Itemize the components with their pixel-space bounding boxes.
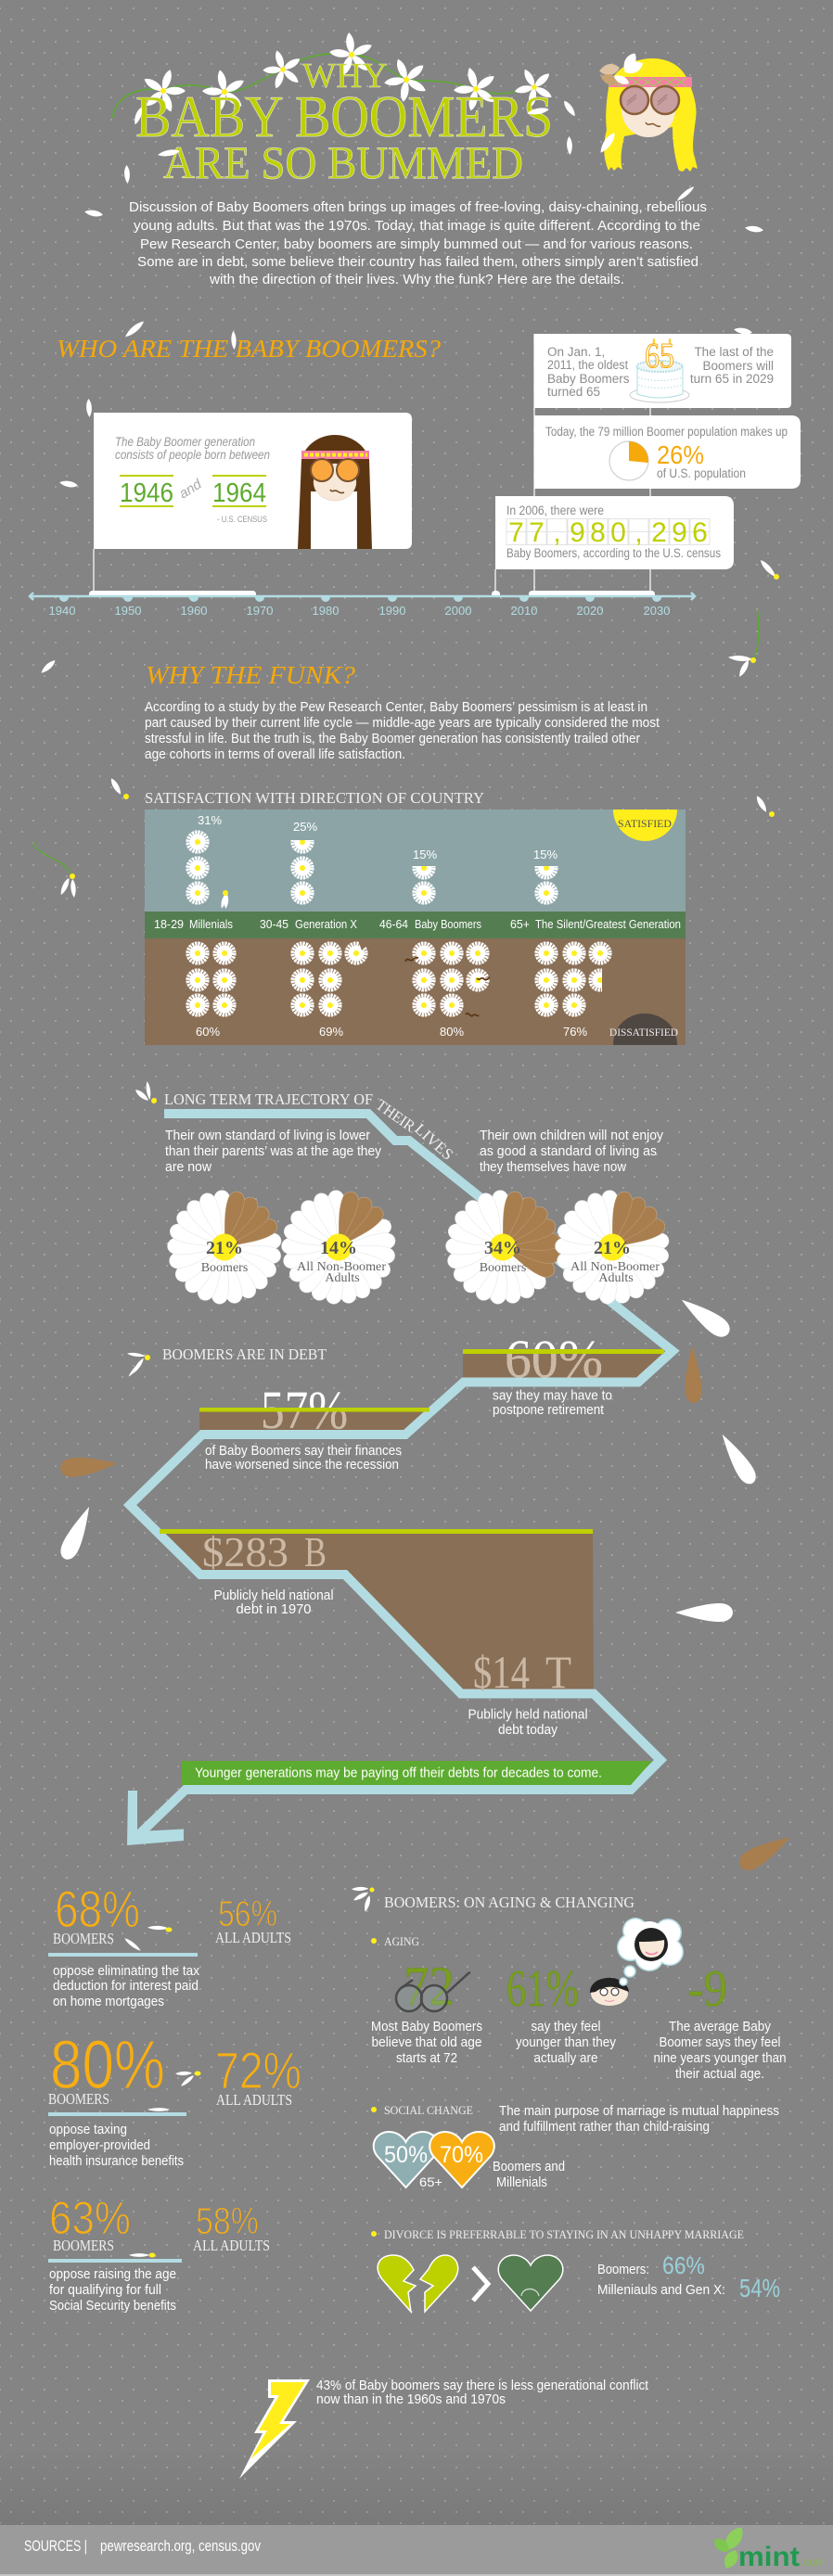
their lives text: LIVES (411, 1120, 456, 1164)
heading: why the funk: WHY THE FUNK? (146, 661, 356, 689)
flip counter: 6 (692, 517, 708, 548)
sun: SATISFIED (618, 817, 672, 830)
stat: national debt 1970: $283 (202, 1528, 288, 1575)
1946: 1946 (120, 478, 173, 508)
brown debt blocks (160, 1349, 664, 1691)
daisy: boomers 21%: 21% (206, 1238, 243, 1258)
timeline: 2030 (644, 604, 670, 618)
stat: national debt today: $14 (473, 1646, 530, 1698)
why the funk paragraph: age cohorts in terms of overall life satisfaction. (145, 746, 405, 762)
hearts: 50% and 70%: Boomers and (493, 2159, 565, 2174)
panel: birth years (94, 413, 412, 549)
panel: age 65: Baby Boomers (547, 372, 630, 386)
stat: national debt 1970: Publicly held national (213, 1588, 334, 1603)
why the funk paragraph: stressful in life. But the truth is, the Baby Boomer generation has consistently trailed other (145, 731, 640, 746)
panel: age 65: turn 65 in 2029 (690, 372, 774, 386)
text: standard of living left: are now (165, 1159, 211, 1175)
text: standard of living right: they themselves have now (480, 1159, 626, 1175)
daisy: boomers 34% (445, 1190, 560, 1305)
stat: national debt today (468, 1646, 588, 1738)
stat: feel younger 61%: younger than they (516, 2034, 616, 2050)
generation labels (154, 918, 681, 931)
text: purpose of marriage: and fulfillment rather than child-raising (499, 2119, 710, 2135)
title: ARE SO BUMMED (163, 136, 523, 188)
stat: mortgage deduction: 56% (218, 1894, 277, 1934)
stat: feel younger 61% (506, 1960, 616, 2066)
stat: 57% finances worsened: of Baby Boomers say their finances (205, 1443, 402, 1459)
heading: boomers are in debt: BOOMERS ARE IN DEBT (162, 1345, 327, 1363)
flip counter: , (634, 517, 643, 548)
heading: boomers are in debt (127, 1345, 327, 1378)
hearts: 50% and 70%: 70% (440, 2142, 483, 2168)
text: standard of living left (165, 1128, 381, 1175)
why the funk paragraph: According to a study by the Pew Research Center, Baby Boomers’ pessimism is at least in (145, 699, 647, 715)
stat: 60% postpone retirement: 60% (505, 1329, 603, 1389)
stat: nine years younger: Boomer says they feel (659, 2034, 781, 2050)
stat: 57% finances worsened: 57% (261, 1380, 348, 1440)
arrow head (127, 1791, 184, 1845)
stat: mortgage deduction: BOOMERS (53, 1930, 114, 1947)
text: standard of living right: Their own children will not enjoy (480, 1128, 663, 1143)
panel: age 65 (534, 334, 791, 408)
worms (405, 958, 490, 1016)
stat: national debt 1970: B (304, 1528, 327, 1575)
header petals (59, 99, 763, 489)
dissatisfied percentages (196, 1025, 587, 1039)
panel: birth years: The Baby Boomer generation (115, 434, 255, 449)
panel: birth years: consists of people born between (115, 447, 270, 462)
stat: mortgage deduction: deduction for interest paid (53, 1978, 199, 1994)
stat: 57% finances worsened: have worsened since the recession (205, 1457, 399, 1473)
satisfied daisies (187, 833, 557, 909)
heading: on aging and changing: BOOMERS: ON AGING & CHANGING (384, 1894, 634, 1911)
stat: old age 72 (371, 1956, 482, 2066)
satisfied percentages: 15% (533, 848, 557, 861)
generation labels: 18-29 (154, 918, 184, 931)
daisy: boomers 34%: Boomers (480, 1261, 526, 1275)
generation labels: 65+ (510, 918, 530, 931)
stat: divorce percentages: 66% (662, 2251, 705, 2279)
flip counter: 9 (570, 517, 585, 548)
title (135, 57, 553, 188)
hearts: 50% and 70%: 65+ (419, 2174, 442, 2189)
panel: age 65: On Jan. 1, (547, 345, 605, 359)
panel: age 65: Boomers will (702, 359, 774, 373)
generation labels: Generation X (295, 918, 358, 931)
stat: feel younger 61%: say they feel (531, 2019, 601, 2034)
text: standard of living left: Their own standard of living is lower (165, 1128, 370, 1143)
chart petals (33, 777, 775, 898)
stat: social security: oppose raising the age (49, 2266, 176, 2282)
timeline: 2000 (445, 604, 471, 618)
stat: nine years younger (653, 1960, 787, 2082)
mint logo (711, 2523, 825, 2572)
daisy: non-boomers 14% (281, 1190, 396, 1305)
dissatisfied percentages: 80% (440, 1025, 464, 1039)
callout: younger generations: Younger generations may be paying off their debts for decades to come. (195, 1766, 602, 1780)
stat: mortgage deduction: 68% (55, 1880, 140, 1938)
flip counter: 8 (590, 517, 606, 548)
daisy: non-boomers 14%: Adults (325, 1271, 360, 1285)
panel: age 65: turned 65 (547, 385, 600, 399)
stat: old age 72: starts at 72 (396, 2050, 457, 2066)
flip counter: 2 (651, 517, 667, 548)
stat: mortgage deduction: ALL ADULTS (215, 1929, 291, 1946)
satisfied percentages: 31% (198, 813, 222, 827)
timeline: 2010 (511, 604, 537, 618)
icon: man imagining young self (590, 1918, 684, 2006)
text: generational conflict: 43% of Baby boomers say there is less generational conflict (316, 2378, 649, 2393)
timeline: 1980 (313, 604, 339, 618)
daisy: non-boomers 21%: All Non-Boomer (570, 1260, 660, 1274)
icon: brown-haired hippie (298, 435, 372, 549)
heading: who are the baby boomers: WHO ARE THE BABY BOOMERS? (57, 335, 442, 363)
stat: old age 72: Most Baby Boomers (371, 2019, 482, 2034)
satisfied percentages: 15% (413, 848, 437, 861)
icon: blonde hippie girl (598, 51, 698, 172)
stat: nine years younger: The average Baby (669, 2019, 771, 2034)
satisfied percentages: 25% (293, 820, 317, 834)
text: purpose of marriage: The main purpose of marriage is mutual happiness (499, 2103, 779, 2119)
text: purpose of marriage (499, 2103, 779, 2135)
flower in hair (598, 51, 645, 88)
timeline: 1990 (379, 604, 405, 618)
generation labels: Baby Boomers (415, 918, 481, 931)
intro paragraph: Pew Research Center, baby boomers are simply bummed out — and for various reasons. (140, 236, 693, 252)
panel: population count (495, 496, 734, 569)
stat: nine years younger: nine years younger than (653, 2050, 787, 2066)
heading: long term trajectory: LONG TERM TRAJECTORY OF (164, 1090, 373, 1108)
large falling petals (58, 1293, 795, 1874)
panel: population count: Baby Boomers, according to the U.S. census (506, 546, 721, 560)
stat: divorce percentages: 54% (739, 2274, 780, 2302)
stat: mortgage deduction: oppose eliminating the tax (53, 1963, 199, 1979)
intro paragraph: with the direction of their lives. Why the funk? Here are the details. (209, 272, 624, 287)
timeline: 1950 (115, 604, 141, 618)
flip counter: 7 (508, 517, 524, 548)
stat: social security: BOOMERS (53, 2237, 114, 2254)
sunglasses (621, 86, 679, 114)
daisy: non-boomers 21%: Adults (598, 1271, 634, 1285)
hearts: 50% and 70% (374, 2132, 565, 2190)
panel: age 65: 2011, the oldest (547, 358, 628, 372)
social change label: SOCIAL CHANGE (384, 2103, 473, 2117)
generation labels: The Silent/Greatest Generation (535, 918, 681, 931)
stat: 60% postpone retirement: say they may have to (493, 1387, 612, 1404)
stat: health insurance: health insurance benefits (49, 2153, 184, 2169)
satisfied percentages (198, 813, 557, 861)
text: standard of living left: than their parents’ was at the age they (165, 1143, 381, 1159)
timeline: 1970 (247, 604, 273, 618)
stat: 57% finances worsened: 57% (261, 1380, 348, 1440)
why the funk paragraph: part caused by their current life cycle — middle-age years are typically considered the most (145, 715, 660, 731)
heading: long term trajectory (134, 1081, 373, 1108)
stat: nine years younger: -9 (688, 1960, 727, 2018)
stat: 60% postpone retirement: 60% (505, 1329, 603, 1389)
generation labels: 46-64 (379, 918, 408, 931)
daisy: non-boomers 21%: 21% (594, 1238, 631, 1258)
panel: population share: of U.S. population (657, 466, 746, 480)
arrow path (130, 1114, 673, 1841)
intro paragraph: Some are in debt, some believe their country has failed them, others simply aren’t satisfied (137, 254, 698, 270)
sources (24, 2537, 261, 2555)
stat: health insurance: oppose taxing (49, 2122, 127, 2137)
panel: population share: Today, the 79 million Boomer population makes up (545, 425, 788, 439)
flip counter: 0 (610, 517, 626, 548)
title: WHY (302, 57, 388, 96)
panel: population share (534, 415, 801, 489)
mint logo: .com (801, 2555, 825, 2569)
text: generational conflict: now than in the 1960s and 1970s (316, 2391, 506, 2407)
daisy chain vine (112, 27, 563, 120)
stat: national debt 1970 (160, 1528, 593, 1617)
and: and (176, 476, 205, 502)
stat: health insurance (48, 2026, 301, 2169)
stat: social security: for qualifying for full (49, 2282, 161, 2298)
burrow: DISSATISFIED (609, 1026, 678, 1039)
flip counter: , (553, 517, 561, 548)
chart: satisfaction with direction of country (145, 810, 686, 1045)
thought cloud (617, 1918, 684, 1971)
stat: old age 72: 72 (404, 1956, 455, 2017)
daisy: boomers 34%: 34% (484, 1238, 521, 1258)
stat: 60% postpone retirement (463, 1341, 664, 1417)
1964: 1964 (212, 478, 266, 508)
icon: lightning bolt (239, 2379, 310, 2479)
timeline: 2020 (577, 604, 603, 618)
falling petal and stem (40, 558, 779, 678)
panel: age 65: The last of the (694, 345, 774, 359)
icon: reading glasses (396, 1972, 470, 2011)
stat: health insurance: ALL ADULTS (216, 2091, 292, 2109)
dissatisfied percentages: 60% (196, 1025, 220, 1039)
icon: broken heart greater than sad heart (378, 2255, 563, 2312)
panel: population share: 26% (657, 440, 704, 469)
stat: social security: ALL ADULTS (193, 2237, 270, 2254)
intro paragraph (129, 199, 707, 287)
callout: younger generations (182, 1761, 652, 1785)
intro paragraph: Discussion of Baby Boomers often brings up images of free-loving, daisy-chaining, rebellious (129, 199, 707, 215)
flip counter: 7 (529, 517, 545, 548)
dissatisfied percentages: 76% (563, 1025, 587, 1039)
stat: nine years younger: their actual age. (675, 2066, 764, 2082)
timeline: 1940 (49, 604, 75, 618)
stat: mortgage deduction (48, 1880, 291, 2009)
heading: satisfaction chart: SATISFACTION WITH DIRECTION OF COUNTRY (145, 789, 484, 807)
flip counter: 9 (672, 517, 687, 548)
stat: divorce percentages: Boomers: (597, 2262, 649, 2277)
stat: health insurance: BOOMERS (48, 2090, 109, 2108)
title: BABY BOOMERS (135, 83, 553, 149)
stat: 60% postpone retirement: postpone retirement (493, 1402, 605, 1418)
stat: national debt today: T (545, 1646, 571, 1698)
daisy: boomers 21% (167, 1190, 282, 1305)
timeline (30, 334, 695, 618)
stat: divorce percentages (597, 2251, 780, 2302)
generation labels: 30-45 (260, 918, 288, 931)
stat: divorce percentages: Milleniauls and Gen X: (597, 2282, 725, 2298)
stat: feel younger 61%: actually are (534, 2050, 597, 2066)
their lives text: THEIR (373, 1096, 419, 1136)
stat: national debt 1970: debt in 1970 (236, 1601, 312, 1617)
flip counter (506, 517, 710, 548)
timeline: 1960 (181, 604, 207, 618)
text: standard of living right (480, 1128, 663, 1175)
stat: old age 72: believe that old age (371, 2034, 482, 2050)
their lives text (373, 1096, 456, 1164)
source: - U.S. CENSUS (217, 515, 267, 524)
generation labels: Millenials (189, 918, 233, 931)
daisy: non-boomers 14%: All Non-Boomer (297, 1260, 386, 1274)
daisy: non-boomers 21% (555, 1190, 670, 1305)
stat: health insurance: 80% (50, 2026, 165, 2103)
aging label: AGING (384, 1934, 419, 1948)
heading: on aging and changing (352, 1887, 634, 1912)
burrow (609, 1014, 678, 1045)
stat: national debt today: Publicly held national (468, 1706, 588, 1723)
stat: health insurance: 72% (215, 2041, 301, 2099)
sources: pewresearch.org, census.gov (100, 2537, 261, 2555)
panel: population count: In 2006, there were (506, 504, 604, 517)
icon: birthday cake (630, 337, 689, 402)
stat: 57% finances worsened (199, 1392, 429, 1469)
sources: SOURCES | (24, 2537, 87, 2555)
icon: birthday cake: 65 (645, 337, 674, 376)
divorce label: DIVORCE IS PREFERRABLE TO STAYING IN AN UNHAPPY MARRIAGE (384, 2227, 744, 2241)
sun (613, 810, 677, 841)
dissatisfied percentages: 69% (319, 1025, 343, 1039)
hearts: 50% and 70%: 50% (384, 2142, 428, 2168)
mint logo: mint (738, 2542, 800, 2572)
stat: health insurance: employer-provided (49, 2137, 150, 2153)
daisy: boomers 21%: Boomers (201, 1261, 248, 1275)
stat: national debt today: debt today (498, 1722, 557, 1738)
why the funk paragraph (145, 699, 660, 762)
stat: mortgage deduction: on home mortgages (53, 1994, 164, 2009)
daisy: non-boomers 14%: 14% (320, 1238, 357, 1258)
aging label (371, 1934, 419, 1948)
pie chart 26% (609, 441, 648, 480)
stat: social security (48, 2192, 270, 2314)
text: generational conflict (316, 2378, 649, 2407)
stat: social security: 58% (196, 2200, 259, 2242)
hearts: 50% and 70%: Millenials (496, 2174, 547, 2190)
headband (609, 77, 692, 87)
stat: social security: 63% (49, 2192, 131, 2244)
intro paragraph: young adults. But that was the 1970s. Today, that image is quite different. According to the (134, 218, 700, 234)
stat: feel younger 61%: 61% (506, 1960, 579, 2018)
footer (0, 2523, 833, 2576)
dissatisfied daisies (187, 944, 610, 1014)
text: standard of living right: as good a standard of living as (480, 1143, 657, 1159)
stat: social security: Social Security benefits (49, 2298, 176, 2314)
